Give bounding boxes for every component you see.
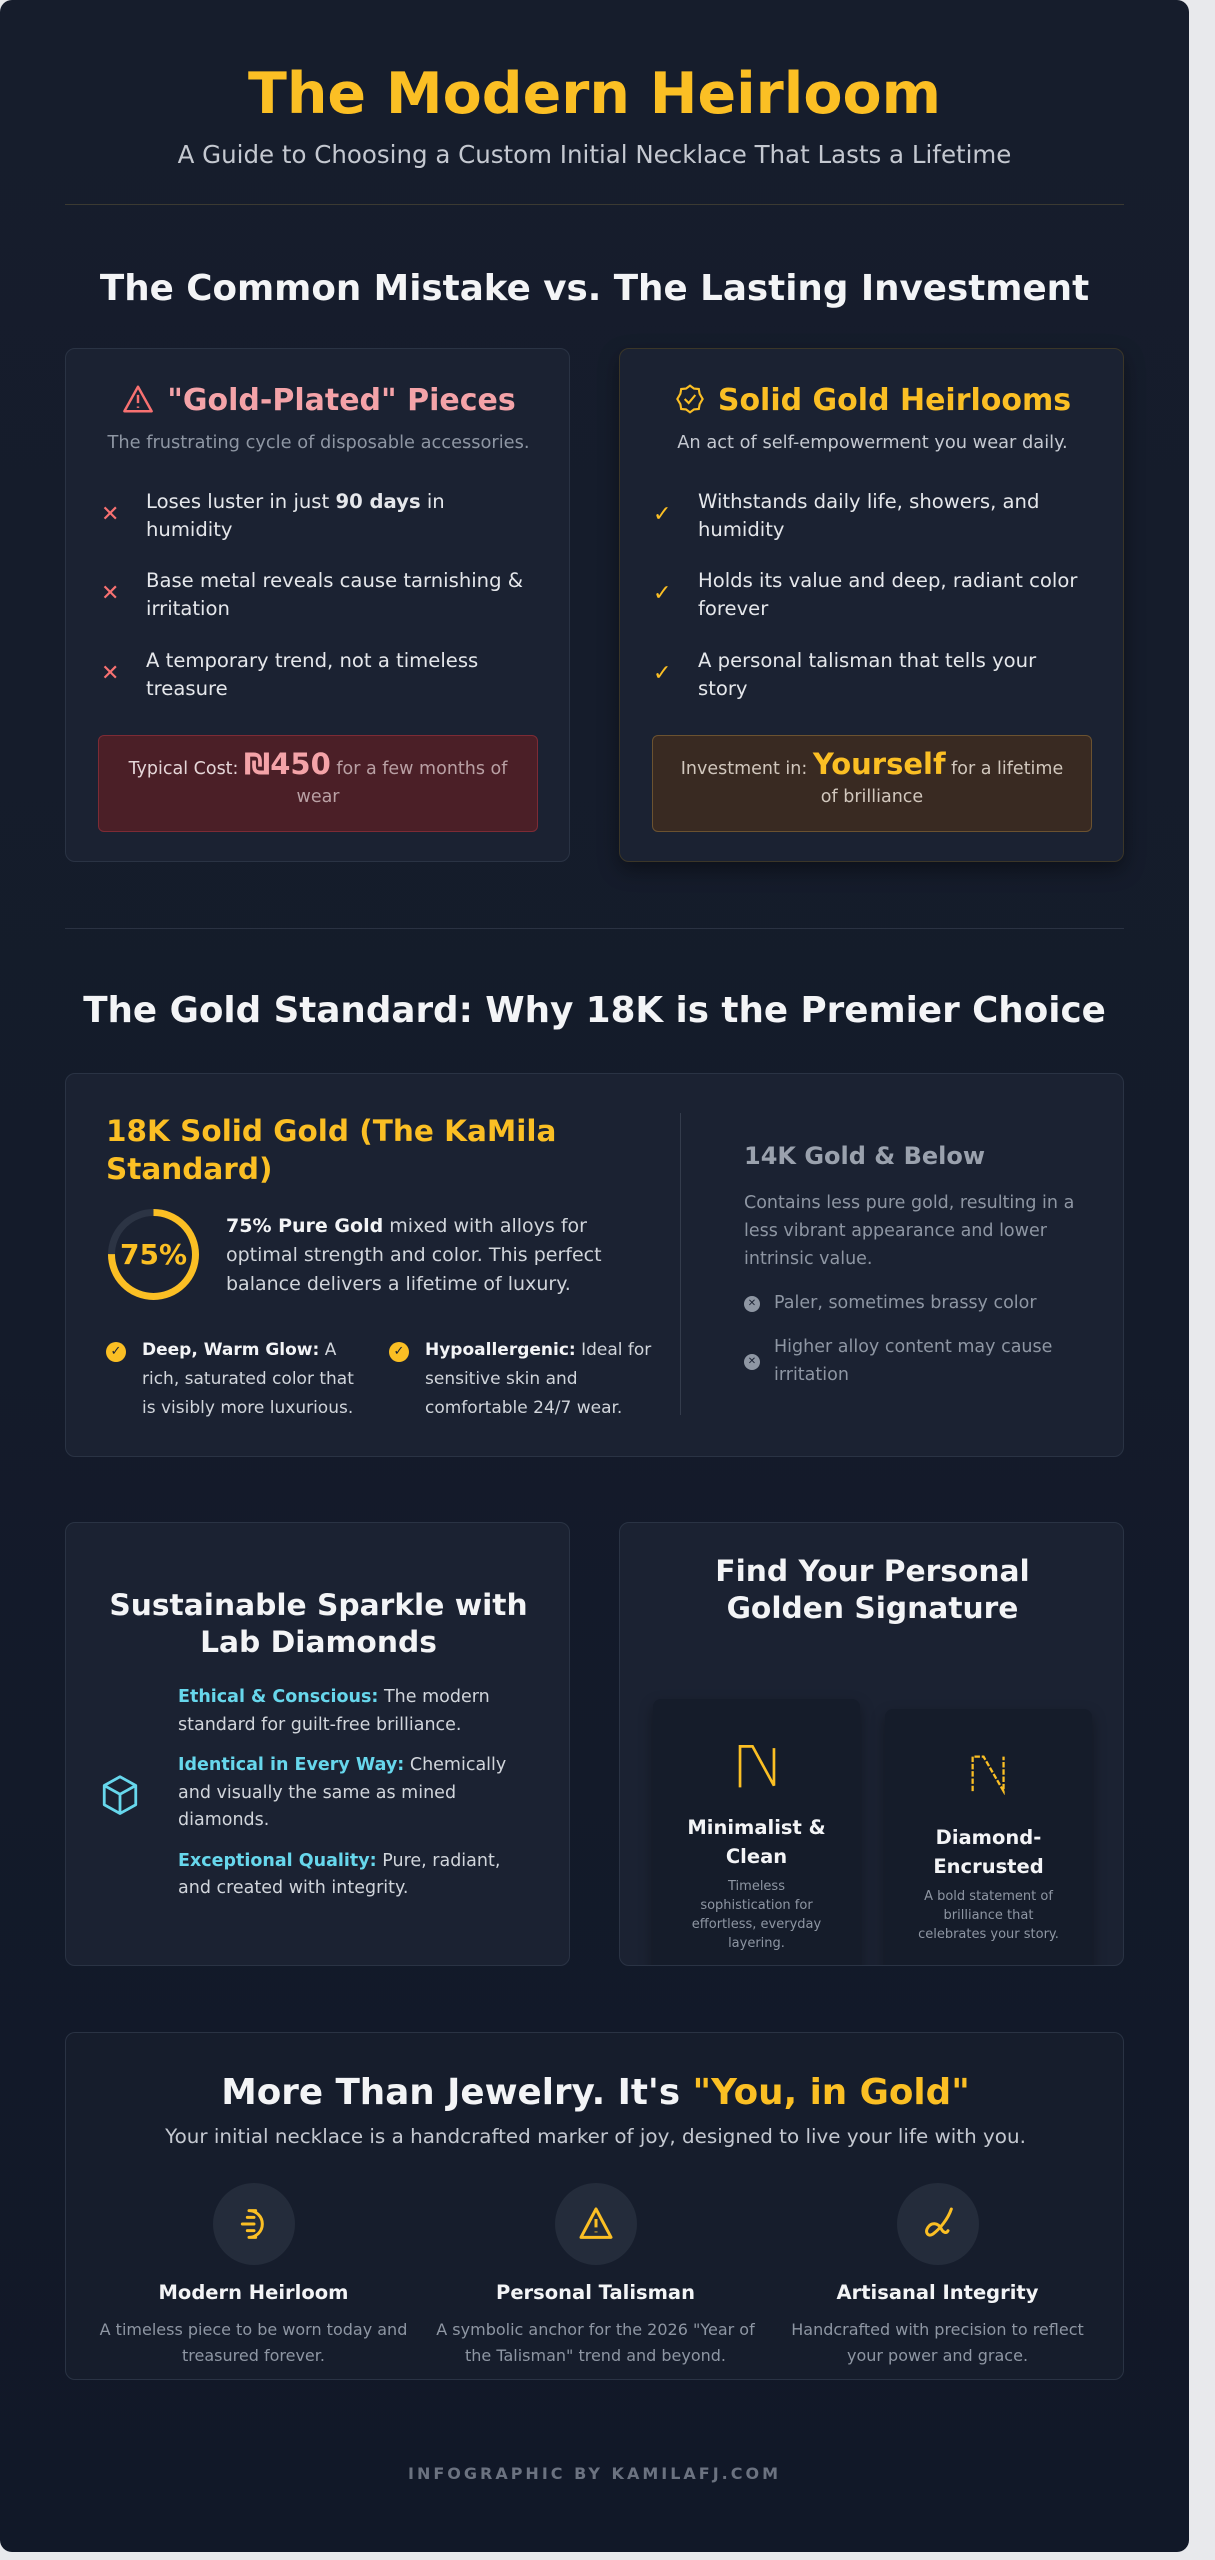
list: cons: A temporary trend, not a timeless [146, 649, 478, 672]
list: pros: forever [698, 597, 768, 620]
list: cons: Loses luster in just 90 days in [146, 490, 445, 513]
panel: gold-plated [65, 348, 570, 862]
list: pros: A personal talisman that tells your [698, 649, 1036, 672]
list: cons: Base metal reveals cause tarnishing & [146, 569, 523, 592]
chart: 75% ring: 75% [120, 1238, 187, 1271]
list: pros [653, 490, 1078, 700]
feature: modern heirloom [100, 2183, 407, 2365]
list: pros: ✓ [653, 581, 671, 606]
list: diamond benefits: Ethical & Conscious: The modern standard for guilt-free brilliance. [178, 1687, 490, 1734]
list: diamond benefits [178, 1687, 506, 1898]
panel: golden signature [619, 1522, 1124, 1966]
card: diamond encrusted [885, 1709, 1092, 1979]
callout: investment: Investment in: Yourself for a lifetime of brilliance [681, 747, 1063, 807]
panel: gold-plated: The frustrating cycle of disposable accessories. [107, 432, 530, 453]
card: minimalist: Clean [726, 1845, 787, 1868]
card: minimalist [653, 1699, 860, 1979]
icon: cube [102, 1775, 138, 1815]
card: diamond encrusted: Diamond- [936, 1826, 1041, 1849]
card: minimalist: Minimalist & [687, 1816, 826, 1839]
list: pros: humidity [698, 518, 785, 541]
panel: solid gold: An act of self-empowerment you wear daily. [677, 432, 1068, 453]
list: cons: ✕ [101, 502, 119, 527]
heading: solid gold: Solid Gold Heirlooms [718, 383, 1071, 418]
subtitle: handcrafted: Your initial necklace is a handcrafted marker of joy, designed to live your life with you. [165, 2125, 1026, 2148]
panel: lab diamonds [65, 1522, 570, 1966]
icon: heirloom [213, 2183, 295, 2265]
card: minimalist: Timeless sophistication for effortless, everyday layering. [692, 1879, 821, 1951]
list: pros: Holds its value and deep, radiant color [698, 569, 1077, 592]
list: 14K drawbacks: Paler, sometimes brassy color [774, 1293, 1037, 1313]
callout: typical cost [98, 735, 538, 832]
list: cons: treasure [146, 677, 228, 700]
card: diamond encrusted: A bold statement of brilliance that celebrates your story. [918, 1889, 1059, 1942]
heading: more than jewelry: More Than Jewelry. It's "You, in Gold" [221, 2072, 970, 2113]
list: cons [101, 490, 523, 700]
icon: artisanal [897, 2183, 979, 2265]
list: diamond benefits: Exceptional Quality: Pure, radiant, and created with integrity. [178, 1850, 500, 1898]
list: 14K drawbacks [744, 1293, 1052, 1385]
list: pros: Withstands daily life, showers, and [698, 490, 1039, 513]
list: diamond benefits: Identical in Every Way: Chemically and visually the same as mined diamonds. [178, 1755, 506, 1830]
feature: personal talisman [436, 2183, 756, 2365]
icon: N minimalist [738, 1745, 776, 1788]
footer: INFOGRAPHIC BY KAMILAFJ.COM [408, 2464, 781, 2483]
list: pros: ✓ [653, 661, 671, 686]
feature: artisanal integrity: Handcrafted with precision to reflect your power and grace. [791, 2320, 1084, 2365]
feature: personal talisman: Personal Talisman [496, 2281, 695, 2304]
feature: artisanal integrity [791, 2183, 1084, 2365]
subtitle: A Guide to Choosing a Custom Initial Necklace That Lasts a Lifetime [178, 140, 1011, 169]
panel: solid gold [619, 348, 1124, 862]
panel: you in gold [65, 2032, 1124, 2380]
panel: 18K comparison [65, 1073, 1124, 1457]
feature: personal talisman: A symbolic anchor for the 2026 "Year of the Talisman" trend and beyond. [436, 2320, 755, 2365]
icon: N diamond [972, 1756, 1005, 1795]
list: cons: irritation [146, 597, 230, 620]
heading: lab diamonds: Sustainable Sparkle with Lab Diamonds [109, 1588, 528, 1660]
list: cons: ✕ [101, 581, 119, 606]
callout: investment [652, 735, 1092, 832]
heading: 14K: 14K Gold & Below [744, 1142, 985, 1170]
list: 14K drawbacks: ✕ [748, 1298, 756, 1309]
heading: golden signature: Find Your Personal Golden Signature [715, 1554, 1030, 1626]
list: cons: humidity [146, 518, 233, 541]
title: The Modern Heirloom [248, 61, 941, 127]
text: 75% pure gold: 75% Pure Gold mixed with alloys for optimal strength and color. This perfect balance delivers a lifetime of luxury. [226, 1215, 602, 1295]
section heading: 18K: The Gold Standard: Why 18K is the Premier Choice [83, 990, 1106, 1031]
heading: 18K: 18K Solid Gold (The KaMila Standard) [106, 1114, 556, 1186]
heading: gold-plated: "Gold-Plated" Pieces [167, 383, 516, 418]
callout: typical cost: Typical Cost: ₪450 for a few months of wear [129, 747, 507, 807]
list: pros: ✓ [653, 502, 671, 527]
list: 14K drawbacks: Higher alloy content may cause irritation [774, 1337, 1052, 1385]
list: pros: story [698, 677, 748, 700]
card: diamond encrusted: Encrusted [933, 1855, 1044, 1878]
bullet: hypoallergenic: ✓ [394, 1344, 404, 1359]
bullet: warm glow: Deep, Warm Glow: A rich, saturated color that is visibly more luxurious. [142, 1340, 354, 1418]
list: cons: ✕ [101, 661, 119, 686]
text: 14K description: Contains less pure gold, resulting in a less vibrant appearance and lower intrinsic value. [744, 1193, 1074, 1269]
icon: talisman [555, 2183, 637, 2265]
section heading: mistake vs investment: The Common Mistake vs. The Lasting Investment [100, 268, 1089, 309]
bullet: hypoallergenic: Hypoallergenic: Ideal for sensitive skin and comfortable 24/7 wear. [425, 1340, 651, 1418]
list: 14K drawbacks: ✕ [748, 1356, 756, 1367]
feature: artisanal integrity: Artisanal Integrity [836, 2281, 1038, 2304]
feature: modern heirloom: A timeless piece to be worn today and treasured forever. [100, 2320, 407, 2365]
feature: modern heirloom: Modern Heirloom [159, 2281, 348, 2304]
bullet: warm glow: ✓ [111, 1344, 121, 1359]
chart: 75% ring [108, 1209, 199, 1300]
